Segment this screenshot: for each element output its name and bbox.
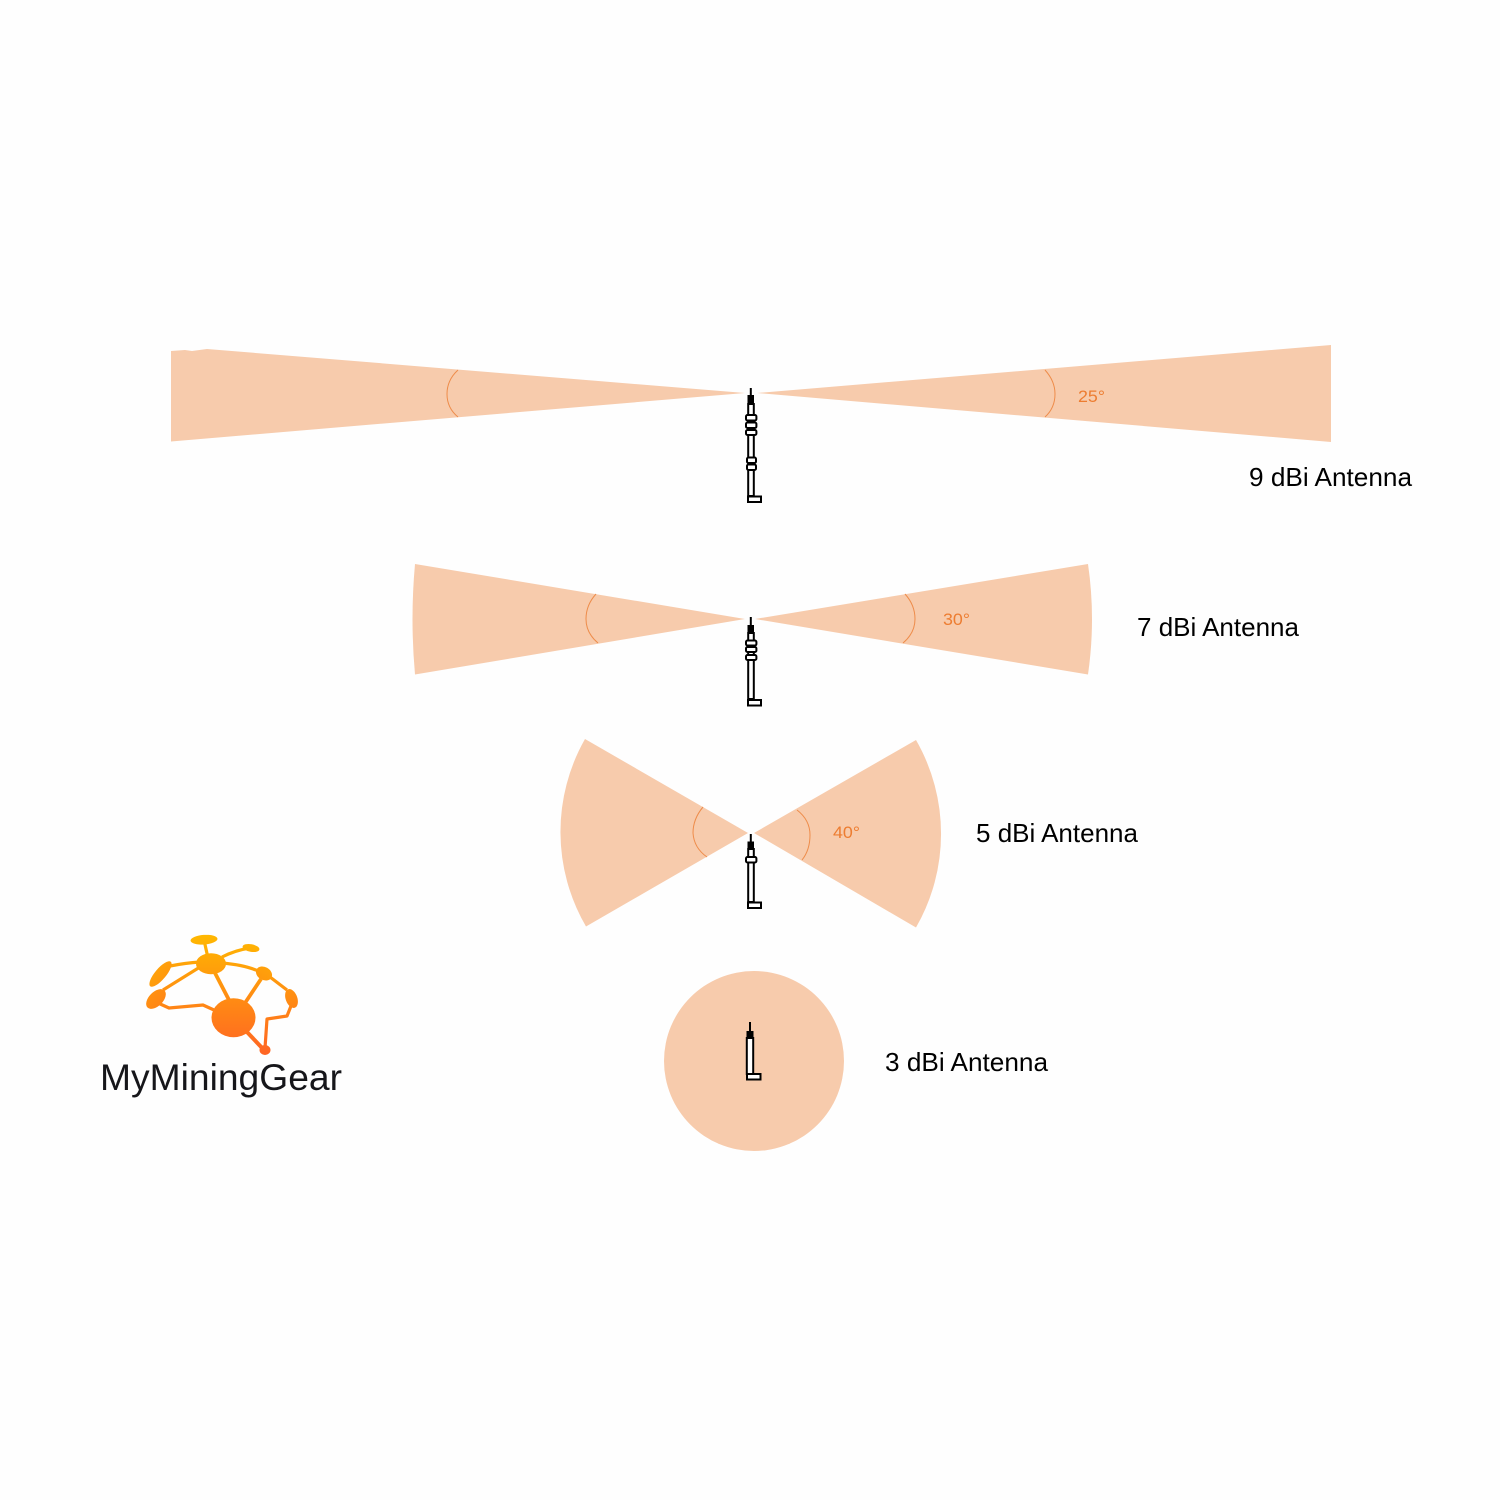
5 dBi left angle arc [693, 807, 707, 857]
icon: 7 dBi antenna [746, 617, 761, 706]
panel: 7 dBi antenna [412, 564, 1300, 706]
logo wordmark: MyMiningGear [100, 1057, 342, 1098]
icon: 3 dBi antenna [747, 1022, 760, 1080]
7 dBi right angle arc [903, 594, 915, 643]
40 degree label: 40° [833, 823, 860, 842]
3 dBi label: 3 dBi Antenna [885, 1047, 1049, 1077]
25 degree label: 25° [1078, 387, 1105, 406]
5 dBi left beam [560, 739, 748, 926]
7 dBi left beam [412, 564, 745, 674]
9 dBi right beam [757, 345, 1331, 442]
icon: network brain [143, 934, 300, 1055]
7 dBi label: 7 dBi Antenna [1137, 612, 1300, 642]
9 dBi left angle arc [447, 370, 458, 417]
panel: 5 dBi antenna [560, 739, 1139, 928]
9 dBi right angle arc [1045, 370, 1055, 417]
9 dBi left beam [171, 349, 745, 442]
7 dBi right beam [755, 564, 1092, 674]
panel: 9 dBi antenna [171, 345, 1413, 502]
3 dBi omnidirectional circle [664, 971, 844, 1151]
icon: 9 dBi antenna [746, 388, 761, 502]
icon: 5 dBi antenna [746, 834, 761, 908]
9 dBi label: 9 dBi Antenna [1249, 462, 1413, 492]
30 degree label: 30° [943, 610, 970, 629]
panel: 3 dBi antenna [664, 971, 1049, 1151]
5 dBi right angle arc [797, 810, 810, 860]
7 dBi left angle arc [586, 594, 598, 643]
5 dBi right beam [754, 740, 941, 928]
5 dBi label: 5 dBi Antenna [976, 818, 1139, 848]
logo: MyMiningGear [100, 934, 342, 1098]
